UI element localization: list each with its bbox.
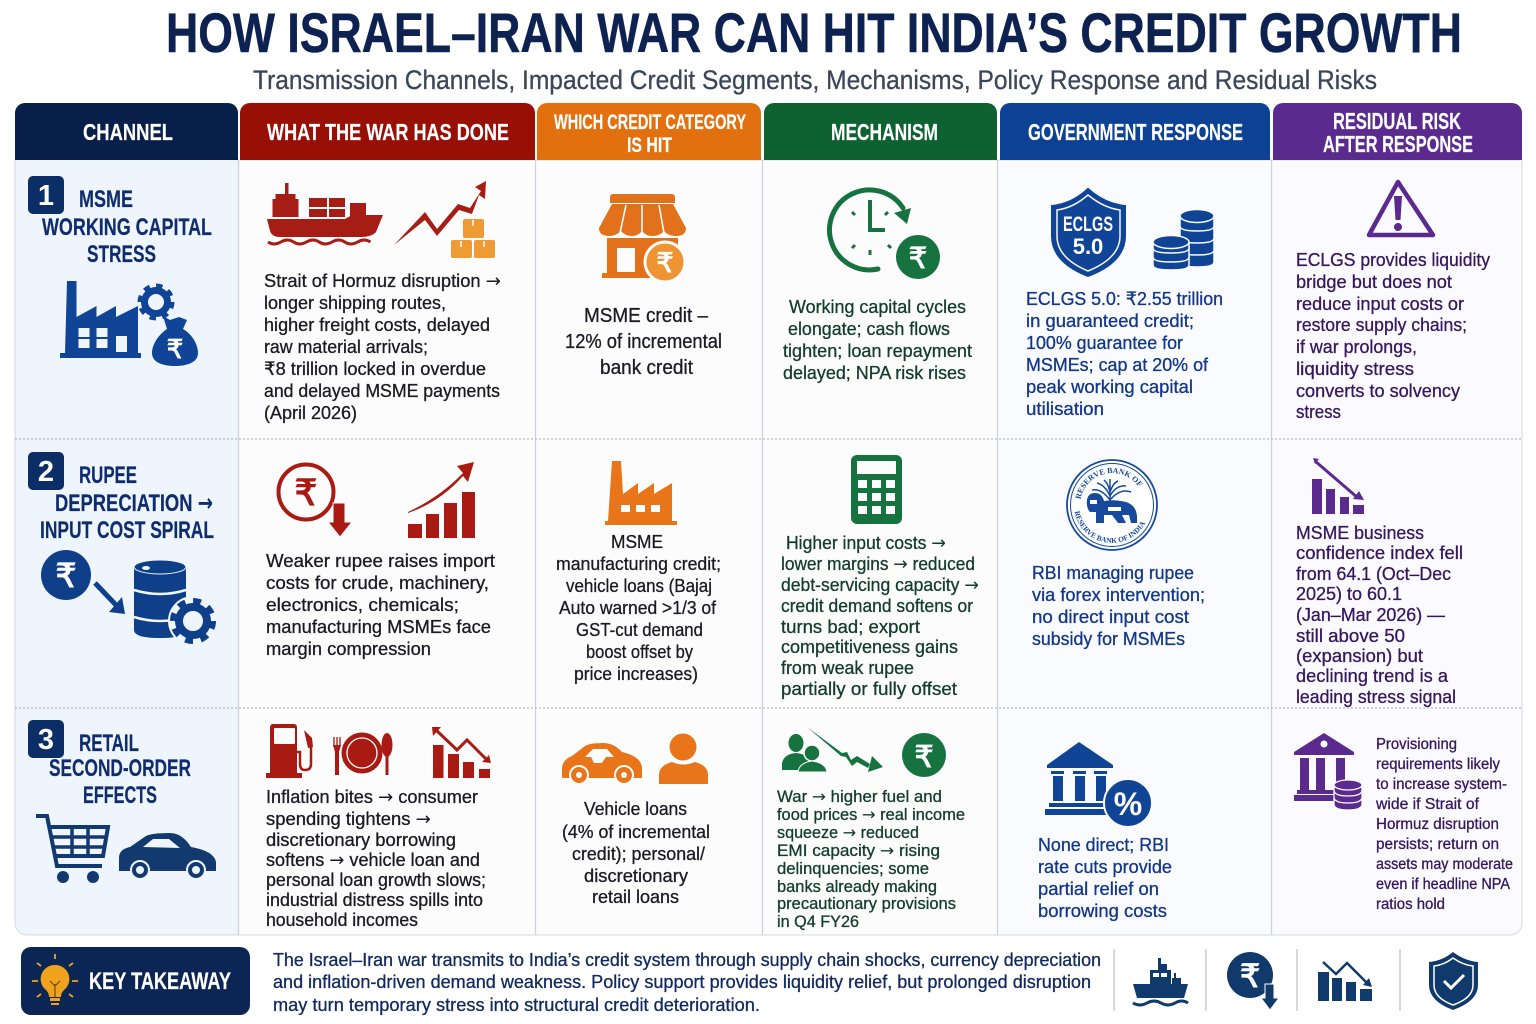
row 2: residual risk text: leading stress signal [1296,686,1456,707]
icon: clock with rupee coin: ₹ [909,243,927,275]
row 2: war effect text [266,550,495,659]
header: which credit category is hit: IS HIT [627,134,672,157]
row 3: mechanism text: delinquencies; some [777,860,929,878]
row 2: credit category text: vehicle loans (Bajaj [566,575,712,596]
row 1: war effect text: longer shipping routes, [264,292,446,313]
row 2: government response text [1032,562,1205,649]
row 2: residual risk text: still above 50 [1296,625,1405,646]
icon: bottom ship [1133,958,1188,1005]
header: which credit category is hit: WHICH CREDIT CATEGORY [554,111,746,134]
icon: people, falling arrow and rupee coin [782,727,946,777]
row 2: government response text: via forex intervention; [1032,584,1205,605]
channel 2 label: INPUT COST SPIRAL [40,517,214,544]
row 1: residual risk text: bridge but does not [1296,271,1452,292]
icon: RBI seal: RESERVE BANK OF INDIA [1074,510,1146,543]
header: mechanism [764,103,997,160]
channel 2 label [28,452,214,544]
icon: bottom rupee down: ₹ [1240,958,1260,994]
row 3: mechanism text: banks already making [777,878,937,896]
icon: rupee to barrel with gear: ₹ [56,557,76,594]
row 3: government response text: borrowing costs [1038,900,1167,921]
row 1: government response text: peak working capital [1026,376,1193,397]
row 3: residual risk text [1375,736,1513,913]
icon: storefront with rupee coin [599,194,686,282]
channel 1 label: WORKING CAPITAL [42,214,212,241]
row 3: residual risk text: even if headline NPA [1376,876,1511,893]
row 1: mechanism text: delayed; NPA risk rises [783,362,966,383]
channel 2 label: RUPEE [79,462,137,489]
icon: bottom rupee down [1227,952,1279,1010]
icon: ECLGS shield and coins: ECLGS [1063,213,1113,236]
row 3: war effect text: industrial distress spills into [266,890,483,910]
row 2: credit category text: Auto warned >1/3 of [559,597,717,618]
row 3: mechanism text: EMI capacity → rising [777,841,940,860]
row 3: credit category text: discretionary [584,865,689,886]
row 3: mechanism text: food prices → real income [777,805,965,824]
row 1: mechanism text: Working capital cycles [789,296,966,317]
channel 1 label: STRESS [87,241,156,268]
key takeaway text: The Israel–Iran war transmits to India’s credit system through supply chain shocks, currency depreciation [273,949,1101,970]
row 1: mechanism text: elongate; cash flows [788,318,950,339]
header: what the war has done: WHAT THE WAR HAS DONE [267,119,509,145]
header: government response: GOVERNMENT RESPONSE [1028,119,1243,145]
row 3: government response text: None direct; RBI [1038,834,1169,855]
row 2: mechanism text: from weak rupee [781,657,914,678]
channel 3 label: SECOND-ORDER [49,755,191,782]
icon: shopping cart and car [36,816,216,883]
row 1: residual risk text: ECLGS provides liquidity [1296,249,1491,270]
row 2: mechanism text: debt-servicing capacity → [781,574,979,596]
row 3: residual risk text: Hormuz disruption [1376,816,1499,833]
icon: bank with percent coin: % [1114,786,1142,822]
icon: bottom shield check [1429,952,1478,1010]
row 1: mechanism text: tighten; loan repayment [783,340,972,361]
row 2: credit category text: manufacturing credit; [556,553,721,574]
row 3: mechanism text: squeeze → reduced [777,823,919,842]
header: channel [15,103,238,160]
icon: RBI seal [1066,459,1158,551]
row 3: government response text [1038,834,1172,921]
row 2: residual risk text: from 64.1 (Oct–Dec [1296,563,1451,584]
row 2: war effect icons: ₹ [295,472,317,513]
row 1: residual risk text: restore supply chains; [1296,314,1467,335]
row 3: residual risk text: to increase system- [1376,776,1507,793]
icon: bank with percent coin [1045,742,1152,827]
row 2: residual risk text: MSME business [1296,522,1424,543]
row 3: residual risk text: wide if Strait of [1375,796,1480,813]
row 1: residual risk text: if war prolongs, [1296,336,1417,357]
row 3: war effect text: Inflation bites → consumer [266,787,478,808]
icon: warning triangle [1369,182,1433,235]
row 3: residual risk text: Provisioning [1376,736,1457,753]
row 3: war effect text: softens → vehicle loan and [266,850,480,871]
channel 3 label: EFFECTS [83,782,157,809]
channel 2 label: DEPRECIATION → [55,489,213,517]
row 2: mechanism text: credit demand softens or [781,595,973,616]
header: residual risk after response: AFTER RESPONSE [1323,131,1473,157]
icon: ECLGS shield and coins [1052,189,1214,276]
row 1: residual risk text: stress [1296,401,1341,422]
header: residual risk after response [1273,103,1522,160]
channel 3 label: 3 [38,724,54,756]
row 1: credit category text [565,305,722,379]
row 1: residual risk text: reduce input costs or [1296,293,1464,314]
row 3: war effect text [266,787,486,930]
row 1: war effect text [264,270,501,423]
row 2: mechanism text: Higher input costs → [786,532,946,554]
row 1: war effect text: raw material arrivals; [264,336,428,357]
icon: bottom declining chart [1318,962,1372,1001]
row 2: residual risk text: confidence index fell [1296,542,1463,563]
row 2: war effect icons [278,462,475,538]
row 2: mechanism text: turns bad; export [781,616,920,637]
header: which credit category is hit [537,103,761,160]
row 1: government response text: MSMEs; cap at 20% of [1026,354,1209,375]
key takeaway text: and inflation-driven demand weakness. Policy support provides liquidity relief, but prolonged disruption [273,971,1091,992]
row 3: credit category text [562,798,710,907]
row 2: mechanism text [781,532,979,699]
row 2: war effect text: costs for crude, machinery, [266,572,489,593]
row 1: war effect text: ₹8 trillion locked in overdue [264,358,486,379]
icon: purple bank with coins [1294,733,1362,810]
row 2: residual risk text: (Jan–Mar 2026) — [1296,604,1445,625]
row 1: government response text: in guaranteed credit; [1026,310,1194,331]
row 2: credit category text: MSME [611,531,663,552]
row 1: government response text: 100% guarantee for [1026,332,1183,353]
row 2: credit category text [556,531,721,684]
row 1: war effect text: Strait of Hormuz disruption → [264,270,501,292]
row 3: credit category text: credit); personal/ [572,843,706,864]
header: channel: CHANNEL [83,119,173,145]
row 1: mechanism text [783,296,972,383]
row 3: war effect text: personal loan growth slows; [266,870,486,890]
row 3: mechanism text: War → higher fuel and [777,787,942,806]
row 2: residual risk text [1296,522,1463,707]
key takeaway badge [21,947,250,1015]
subtitle: Transmission Channels, Impacted Credit Segments, Mechanisms, Policy Response and Residual Risks [253,65,1377,95]
icon: ECLGS shield and coins: 5.0 [1073,234,1103,259]
icon: clock with rupee coin [830,190,940,279]
row 3: residual risk text: persists; return on [1376,836,1499,853]
header: government response [1000,103,1270,160]
row 1: residual risk text [1296,249,1491,422]
row 2: credit category text: boost offset by [586,641,694,662]
row 3: government response text: rate cuts provide [1038,856,1172,877]
row 1: war effect text: (April 2026) [264,402,357,423]
row 3: credit category text: retail loans [592,886,679,907]
row 3: mechanism text: in Q4 FY26 [777,913,859,931]
row 2: residual risk text: (expansion) but [1296,645,1423,666]
row 3: credit category text: (4% of incremental [562,821,710,842]
row 2: credit category text: GST-cut demand [576,619,703,640]
row 1: government response text [1026,288,1223,419]
row 2: war effect text: margin compression [266,638,431,659]
icon: people, falling arrow and rupee coin: ₹ [914,741,934,774]
channel 3 label: RETAIL [79,730,139,757]
icon: rupee to barrel with gear [41,550,218,646]
icon: factory with gear and money bag: ₹ [167,334,183,364]
key takeaway badge: KEY TAKEAWAY [89,968,231,995]
header: residual risk after response: RESIDUAL RISK [1333,108,1461,134]
icon: purple declining chart [1312,458,1364,514]
row 1: war effect text: higher freight costs, delayed [264,314,490,335]
icon: calculator [851,455,902,524]
row 2: war effect text: electronics, chemicals; [266,594,459,615]
channel 1 label: 1 [38,180,54,212]
icon: storefront with rupee coin: ₹ [656,248,674,278]
row 3: war effect icons [266,724,491,778]
row 3: mechanism text: precautionary provisions [777,895,956,913]
row 2: government response text: no direct input cost [1032,606,1189,627]
icon: RBI seal: RESERVE BANK OF [1075,468,1143,500]
row 2: war effect text: Weaker rupee raises import [266,550,495,571]
channel 1 label [28,176,212,268]
row 2: government response text: RBI managing rupee [1032,562,1194,583]
row 1: credit category text: 12% of incremental [565,331,722,353]
table background [15,160,1522,935]
icon: orange factory [605,461,677,525]
row 2: mechanism text: competitiveness gains [781,636,958,657]
row 2: credit category text: price increases) [574,663,698,684]
row 1: credit category text: MSME credit – [584,305,709,327]
channel 2 label: 2 [38,456,54,488]
key takeaway text [273,949,1101,1015]
row 3: residual risk text: ratios hold [1376,896,1445,913]
row 1: government response text: ECLGS 5.0: ₹2.55 trillion [1026,288,1223,309]
row 3: government response text: partial relief on [1038,878,1159,899]
key takeaway text: may turn temporary stress into structural credit deterioration. [273,994,760,1015]
row 2: residual risk text: declining trend is a [1296,665,1449,686]
row 1: residual risk text: liquidity stress [1296,358,1414,379]
row 1: residual risk text: converts to solvency [1296,380,1461,401]
channel 1 label: MSME [79,186,133,213]
row 2: residual risk text: 2025) to 60.1 [1296,583,1402,604]
row 3: residual risk text: assets may moderate [1376,856,1513,873]
header: what the war has done [240,103,535,160]
row 3: war effect text: discretionary borrowing [266,830,456,850]
row 1: credit category text: bank credit [600,357,693,379]
icon: car and person [562,734,708,784]
icon: factory with gear and money bag [60,281,198,366]
row 3: credit category text: Vehicle loans [584,798,687,819]
row 2: war effect text: manufacturing MSMEs face [266,616,491,637]
header: mechanism: MECHANISM [831,119,938,145]
row 3: mechanism text [777,787,965,931]
row 1: government response text: utilisation [1026,398,1104,419]
row 1: war effect icons [267,181,495,258]
row 3: war effect text: household incomes [266,910,418,930]
row 1: war effect text: and delayed MSME payments [264,380,500,401]
row 3: war effect text: spending tightens → [266,809,431,830]
row 2: government response text: subsidy for MSMEs [1032,628,1185,649]
row 3: residual risk text: requirements likely [1376,756,1500,773]
row 2: mechanism text: partially or fully offset [781,678,957,699]
row 2: mechanism text: lower margins → reduced [781,553,975,575]
channel 3 label [28,720,191,809]
